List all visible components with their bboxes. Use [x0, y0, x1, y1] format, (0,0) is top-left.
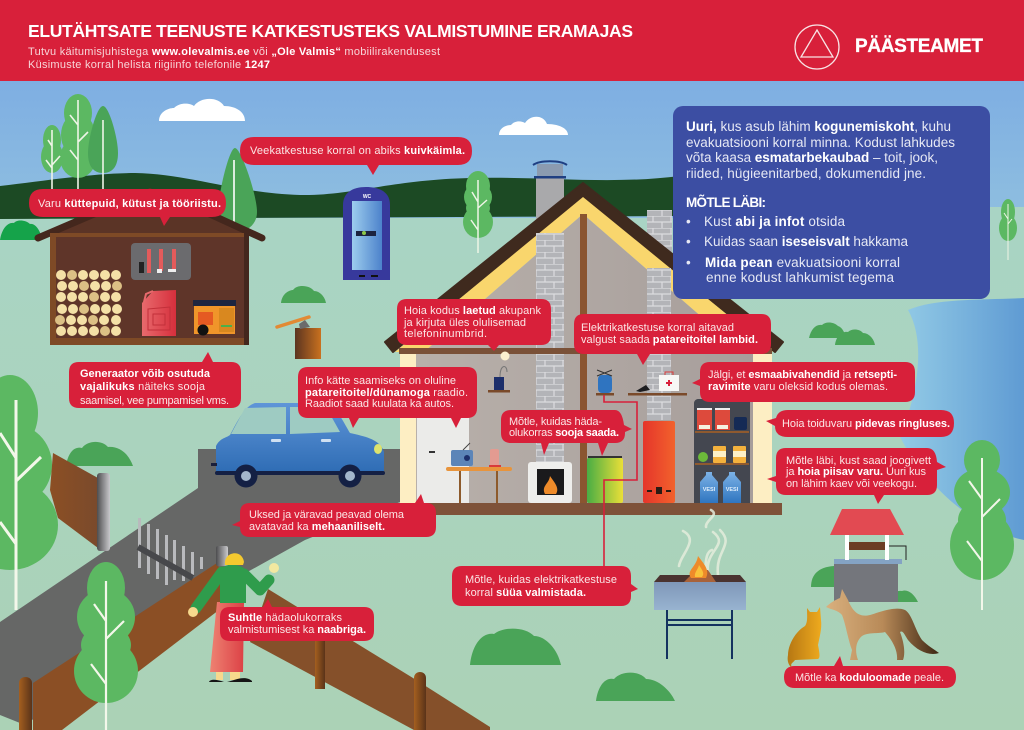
- callout: koduloomad: [784, 656, 956, 688]
- callout: küttepuud: Varu küttepuid, kütust ja tööriistu.: [38, 198, 221, 210]
- intro text: evakuatsiooni korral minna. Kodust lahkudes: [686, 135, 955, 150]
- callout: naabriga: Suhtle hädaolukorraks: [228, 612, 342, 624]
- info panel: [673, 106, 990, 299]
- checklist: Mida pean evakuatsiooni korral: [705, 255, 900, 270]
- intro text: [686, 119, 955, 181]
- callout: generaator: [69, 352, 241, 408]
- callout: joogivesi: Mõtle läbi, kust saad joogivett: [786, 455, 931, 467]
- checklist heading: MÕTLE LÄBI:: [686, 195, 766, 210]
- checklist: •: [686, 255, 691, 270]
- callout: esmaabi: [692, 362, 915, 402]
- checklist: Kuidas saan iseseisvalt hakkama: [704, 234, 908, 249]
- background: dark green hills: [0, 173, 680, 219]
- house walls: [415, 214, 753, 503]
- checklist: •: [686, 234, 691, 249]
- cloud right: [499, 117, 568, 135]
- shelf with power bank: [488, 367, 510, 392]
- callout: mehaaniliselt: [232, 494, 436, 537]
- callout: joogivesi: ja hoia piisav varu. Uuri kus: [785, 466, 926, 478]
- callout: sooja saada: Mõtle, kuidas häda-: [509, 416, 602, 428]
- bushes: [0, 220, 918, 701]
- upper left fence: [50, 453, 110, 551]
- callout: generaator: saamisel, vee pumpamisel vms.: [80, 395, 229, 407]
- title: ELUTÄHTSATE TEENUSTE KATKESTUSTEKS VALMISTUMINE ERAMAJAS: [28, 21, 633, 41]
- callout: raadio: Raadiot saad kuulata ka autos.: [305, 398, 454, 410]
- cloud left: [159, 99, 245, 121]
- callout: kuivkäimla: [240, 137, 472, 175]
- callout: lambid: valgust saada patareitoitel lambid.: [581, 334, 758, 346]
- callout: raadio: patareitoitel/dünamoga raadio.: [305, 387, 468, 399]
- callout: küttepuud: [29, 189, 226, 226]
- cream side columns: [400, 354, 416, 503]
- callout: akupank: Hoia kodus laetud akupank: [404, 305, 542, 317]
- well: [830, 509, 906, 602]
- shed roof: [46, 188, 256, 236]
- lower left fence: [19, 563, 232, 730]
- car: [211, 403, 385, 488]
- chimney right: [647, 210, 672, 270]
- gate: [138, 518, 228, 585]
- stump with axe: [277, 317, 321, 359]
- callout: sooja saada: [501, 410, 632, 456]
- gas stove shelf: [596, 370, 614, 396]
- subtitle: Küsimuste korral helista riigiinfo telefonile 1247: [28, 59, 270, 71]
- callout: sooja saada: olukorras sooja saada.: [509, 427, 619, 439]
- fireplace: [528, 462, 572, 503]
- portable toilet: WC: [363, 194, 372, 200]
- pantry: [694, 399, 750, 503]
- right large tree: [950, 440, 1014, 610]
- intro text: Uuri, kus asub lähim kogunemiskoht, kuhu: [686, 119, 951, 134]
- roof: [385, 183, 783, 352]
- tree on road: [74, 562, 138, 730]
- barbecue grill: [654, 510, 746, 659]
- checklist: enne kodust lahkumist tegema: [706, 270, 894, 285]
- checklist: •: [686, 214, 691, 229]
- person waving: [188, 553, 279, 682]
- callout: süüa valmistada: korral süüa valmistada.: [465, 587, 586, 599]
- cat: [788, 607, 821, 668]
- callout: joogivesi: on lähim kaev või veekogu.: [786, 478, 917, 490]
- generator: [193, 300, 236, 336]
- shed: [38, 188, 262, 345]
- pantry: VESI: [703, 487, 716, 493]
- chimney left: [533, 161, 567, 228]
- callout: lambid: [574, 314, 771, 365]
- intro text: võta kaasa esmatarbekaubad – toit, jook,: [686, 150, 938, 165]
- ceiling lamp: [500, 352, 510, 360]
- table with radio and bottle: [446, 443, 512, 503]
- callout: kuivkäimla: Veekatkestuse korral on abiks kuivkäimla.: [250, 145, 465, 157]
- checklist: [686, 214, 908, 285]
- door: [417, 418, 469, 503]
- road: [0, 449, 400, 725]
- brick column right: [647, 268, 671, 420]
- background: sky: [0, 80, 1024, 220]
- callout: esmaabi: ravimite varu oleksid kodus olemas.: [708, 381, 888, 393]
- red water heater: [643, 421, 675, 503]
- tool board: [131, 243, 191, 280]
- tree behind shed: [218, 148, 257, 232]
- green boiler: [587, 456, 623, 503]
- central beam: [580, 214, 587, 505]
- large tree left: [0, 375, 58, 610]
- checklist: Kust abi ja infot otsida: [704, 214, 845, 229]
- lake: [900, 298, 1024, 540]
- callout: akupank: ja kirjuta üles olulisemad: [403, 317, 526, 329]
- brick column left: [536, 233, 564, 465]
- jerry can: [142, 290, 176, 336]
- callout: generaator: Generaator võib osutuda: [80, 368, 211, 380]
- callout: generaator: vajalikuks näiteks sooja: [80, 381, 206, 393]
- callout: toiduvaru: Hoia toiduvaru pidevas ringluses.: [782, 418, 950, 430]
- callout: koduloomad: Mõtle ka koduloomade peale.: [795, 672, 944, 684]
- red pipe line: [604, 395, 637, 567]
- callout: akupank: [397, 299, 551, 351]
- callout: akupank: telefoninumbrid.: [404, 328, 487, 340]
- callout: mehaaniliselt: avatavad ka mehaaniliselt.: [249, 521, 385, 533]
- small tree right: [999, 199, 1017, 260]
- callout: raadio: [298, 367, 477, 428]
- callout: naabriga: valmistumisest ka naabriga.: [228, 624, 366, 636]
- subtitle: [28, 46, 440, 71]
- floor beam: [399, 348, 772, 354]
- trees top left: [41, 94, 118, 190]
- portable toilet: [343, 187, 390, 280]
- subtitle: Tutvu käitumisjuhistega www.olevalmis.ee või „Ole Valmis“ mobiilirakendusest: [28, 46, 440, 58]
- callout: esmaabi: Jälgi, et esmaabivahendid ja retsepti-: [708, 369, 897, 381]
- intro text: riided, hügieenitarbed, dokumendid jne.: [686, 166, 926, 181]
- callout: mehaaniliselt: Uksed ja väravad peavad olema: [249, 509, 405, 521]
- house: [385, 161, 783, 515]
- firewood logs: [55, 270, 122, 336]
- logo emblem: [795, 25, 839, 69]
- house floor: [400, 503, 782, 515]
- callout: lambid: Elektrikatkestuse korral aitavad: [581, 322, 734, 334]
- tree behind house: [463, 171, 493, 253]
- lower right fence: [250, 589, 490, 730]
- dog: [826, 589, 939, 660]
- yellow roof lining: [395, 197, 773, 352]
- background: ground: [0, 207, 1024, 730]
- callout: toiduvaru: [766, 410, 954, 437]
- callout: naabriga: [220, 599, 374, 641]
- callout: raadio: Info kätte saamiseks on oluline: [305, 375, 456, 387]
- callout: süüa valmistada: Mõtle, kuidas elektrikatkestuse: [465, 574, 617, 586]
- callout: süüa valmistada: [452, 566, 638, 606]
- shelf with flashlight and first aid kit: [628, 372, 687, 396]
- header: [0, 0, 1024, 81]
- callout: joogivesi: [767, 448, 946, 504]
- logo wordmark: PÄÄSTEAMET: [855, 36, 983, 57]
- pantry: VESI: [726, 487, 739, 493]
